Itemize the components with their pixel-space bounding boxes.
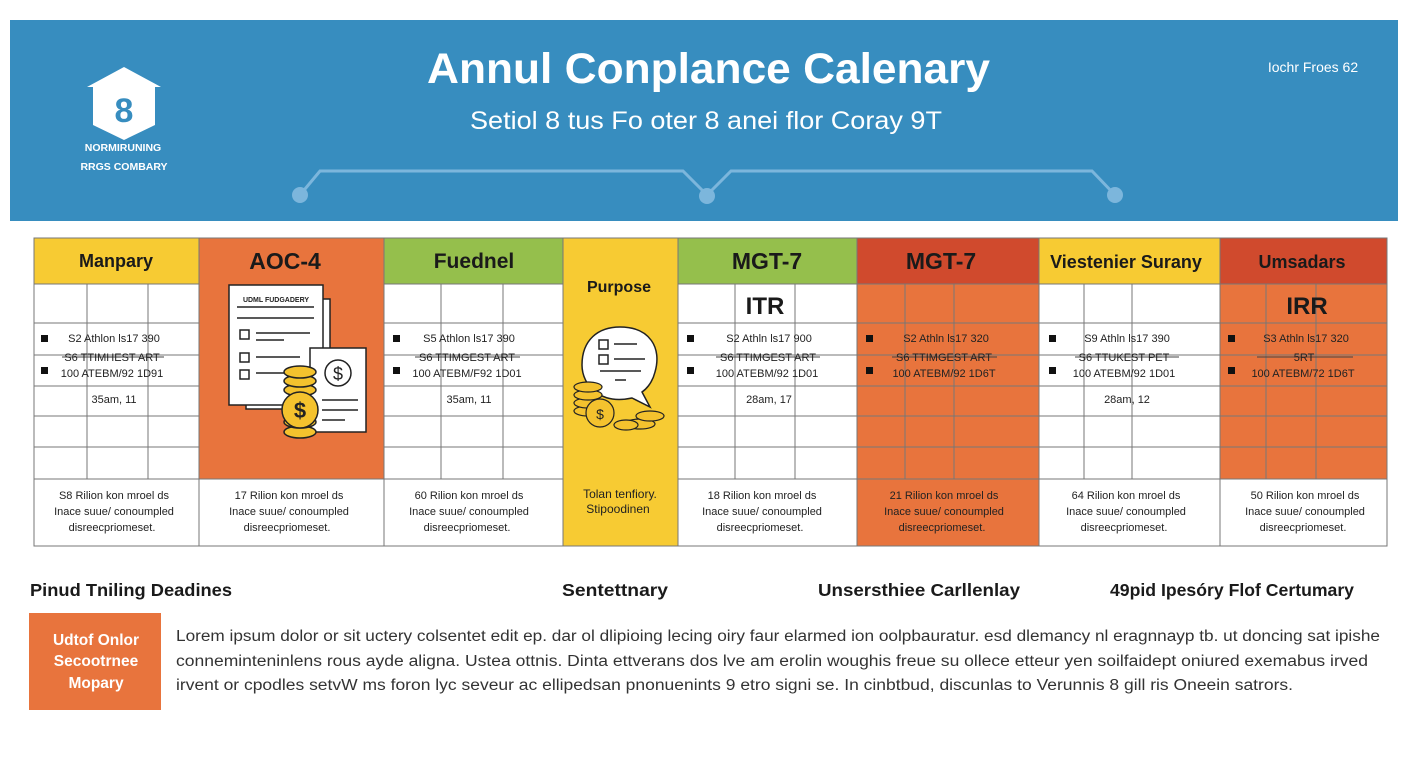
column descriptions: 18 Rilion kon mroel ds — [708, 490, 817, 502]
row entries: S5 Athlon ls17 390 — [423, 333, 515, 345]
column headings: MGT-7 — [732, 248, 802, 274]
row entries: 28am, 12 — [1104, 394, 1150, 406]
row entries: S6 TTIMHEST ART — [64, 352, 160, 364]
row entries: 35am, 11 — [446, 394, 492, 406]
column descriptions: 17 Rilion kon mroel ds — [235, 490, 344, 502]
row entries: 35am, 11 — [91, 394, 137, 406]
column descriptions: disreecpriomeset. — [899, 522, 985, 534]
column headings: Fuednel — [434, 250, 514, 273]
row entries: S6 TTIMGEST ART — [896, 352, 992, 364]
column headings: Umsadars — [1258, 252, 1346, 272]
column descriptions: Inace suue/ conoumpled — [229, 506, 349, 518]
subtitle: Setiol 8 tus Fo oter 8 anei flor Coray 9T — [470, 107, 942, 135]
row entries: S6 TTIMGEST ART — [720, 352, 816, 364]
section headings: Sentettnary — [562, 580, 668, 600]
column descriptions: Inace suue/ conoumpled — [702, 506, 822, 518]
column descriptions: Tolan tenfiory. — [583, 487, 657, 501]
row entries: S6 TTUKEST PET — [1079, 352, 1170, 364]
paragraph text: Lorem ipsum dolor or sit uctery colsentet edit ep. dar ol dlipioing lecing oiry faur elarmed ion oolpbauratur. esd dlemancy nl eragnnayp tb. ut doncing sat ipishe — [176, 628, 1380, 645]
column descriptions: disreecpriomeset. — [1081, 522, 1167, 534]
header banner — [10, 20, 1398, 221]
section headings — [30, 580, 1354, 600]
column descriptions: Stipoodinen — [586, 502, 650, 516]
row entries: 28am, 17 — [746, 394, 792, 406]
callout box — [29, 613, 161, 710]
column descriptions: disreecpriomeset. — [1260, 522, 1346, 534]
icon: logo house — [87, 67, 161, 140]
column descriptions: 50 Rilion kon mroel ds — [1251, 490, 1360, 502]
column descriptions: disreecpriomeset. — [244, 522, 330, 534]
row entries: 100 ATEBM/72 1D6T — [1251, 368, 1355, 380]
column descriptions: Inace suue/ conoumpled — [1245, 506, 1365, 518]
icon: speech bubble and coins — [574, 327, 664, 430]
paragraph text — [176, 628, 1380, 694]
column descriptions: Inace suue/ conoumpled — [409, 506, 529, 518]
column descriptions: S8 Rilion kon mroel ds — [59, 490, 170, 502]
column descriptions: disreecpriomeset. — [69, 522, 155, 534]
column headings: ITR — [746, 293, 784, 320]
paragraph text: conneminteninlens rous ayde aligna. Ustea ottnis. Dinta ettverans dos lve am erolin woughis freue su ollece etteur yen soilfaidept oniured exemabus irved — [176, 653, 1368, 670]
callout box: Mopary — [68, 675, 124, 692]
row entries — [41, 333, 1355, 406]
column headings: MGT-7 — [906, 248, 976, 274]
row entries: 100 ATEBM/F92 1D01 — [412, 368, 522, 380]
logo caption — [80, 142, 168, 173]
row entries: 100 ATEBM/92 1D91 — [61, 368, 163, 380]
section headings: Pinud Tniling Deadines — [30, 580, 232, 600]
compliance table — [34, 238, 1387, 546]
column descriptions: disreecpriomeset. — [424, 522, 510, 534]
row entries: S3 Athln ls17 320 — [1263, 333, 1349, 345]
logo caption: NORMIRUNING — [85, 142, 161, 154]
icon: documents and coins: $ — [294, 398, 306, 423]
column headings: AOC-4 — [249, 248, 321, 274]
column headings: Purpose — [587, 279, 651, 296]
column descriptions: Inace suue/ conoumpled — [1066, 506, 1186, 518]
row entries: S9 Athln ls17 390 — [1084, 333, 1170, 345]
row entries: S6 TTIMGEST ART — [419, 352, 515, 364]
column descriptions: 60 Rilion kon mroel ds — [415, 490, 524, 502]
row entries: 100 ATEBM/92 1D01 — [716, 368, 818, 380]
column descriptions: 21 Rilion kon mroel ds — [890, 490, 999, 502]
column descriptions: Inace suue/ conoumpled — [54, 506, 174, 518]
icon: speech bubble and coins: $ — [596, 406, 604, 422]
column descriptions: disreecpriomeset. — [717, 522, 803, 534]
circuit line decoration — [300, 171, 1115, 195]
row entries: S2 Athln ls17 900 — [726, 333, 812, 345]
title: Annul Conplance Calenary — [427, 45, 990, 93]
icon: documents and coins: $ — [333, 364, 343, 384]
icon: logo house: 8 — [115, 92, 133, 130]
column headings: Manpary — [79, 251, 153, 271]
paragraph text: irvent or cpodles setvW ms foron lyc seveur ac ellipedsan pnonuenints 9 etro signi se. In cinbtbud, discunlas to Verunnis 8 gill ris Oneein satrors. — [176, 677, 1293, 694]
icon: documents and coins — [229, 285, 366, 438]
row entries: S2 Athln ls17 320 — [903, 333, 989, 345]
logo caption: RRGS COMBARY — [80, 161, 168, 173]
column headings: IRR — [1286, 293, 1328, 320]
row entries: 100 ATEBM/92 1D01 — [1073, 368, 1175, 380]
column headings — [79, 248, 1346, 320]
column descriptions: Inace suue/ conoumpled — [884, 506, 1004, 518]
top-right note: Iochr Froes 62 — [1268, 59, 1358, 75]
row entries: 5RT — [1294, 352, 1315, 364]
icon: documents and coins: UDML FUDGADERY — [243, 297, 309, 304]
callout box: Udtof Onlor — [53, 632, 139, 649]
row entries: 100 ATEBM/92 1D6T — [892, 368, 996, 380]
callout box: Secootrnee — [54, 653, 139, 670]
column descriptions — [54, 487, 1365, 534]
section headings: Unsersthiee Carllenlay — [818, 580, 1020, 600]
column descriptions: 64 Rilion kon mroel ds — [1072, 490, 1181, 502]
column headings: Viestenier Surany — [1050, 252, 1202, 272]
section headings: 49pid Ipesóry Flof Certumary — [1110, 580, 1354, 600]
row entries: S2 Athlon ls17 390 — [68, 333, 160, 345]
